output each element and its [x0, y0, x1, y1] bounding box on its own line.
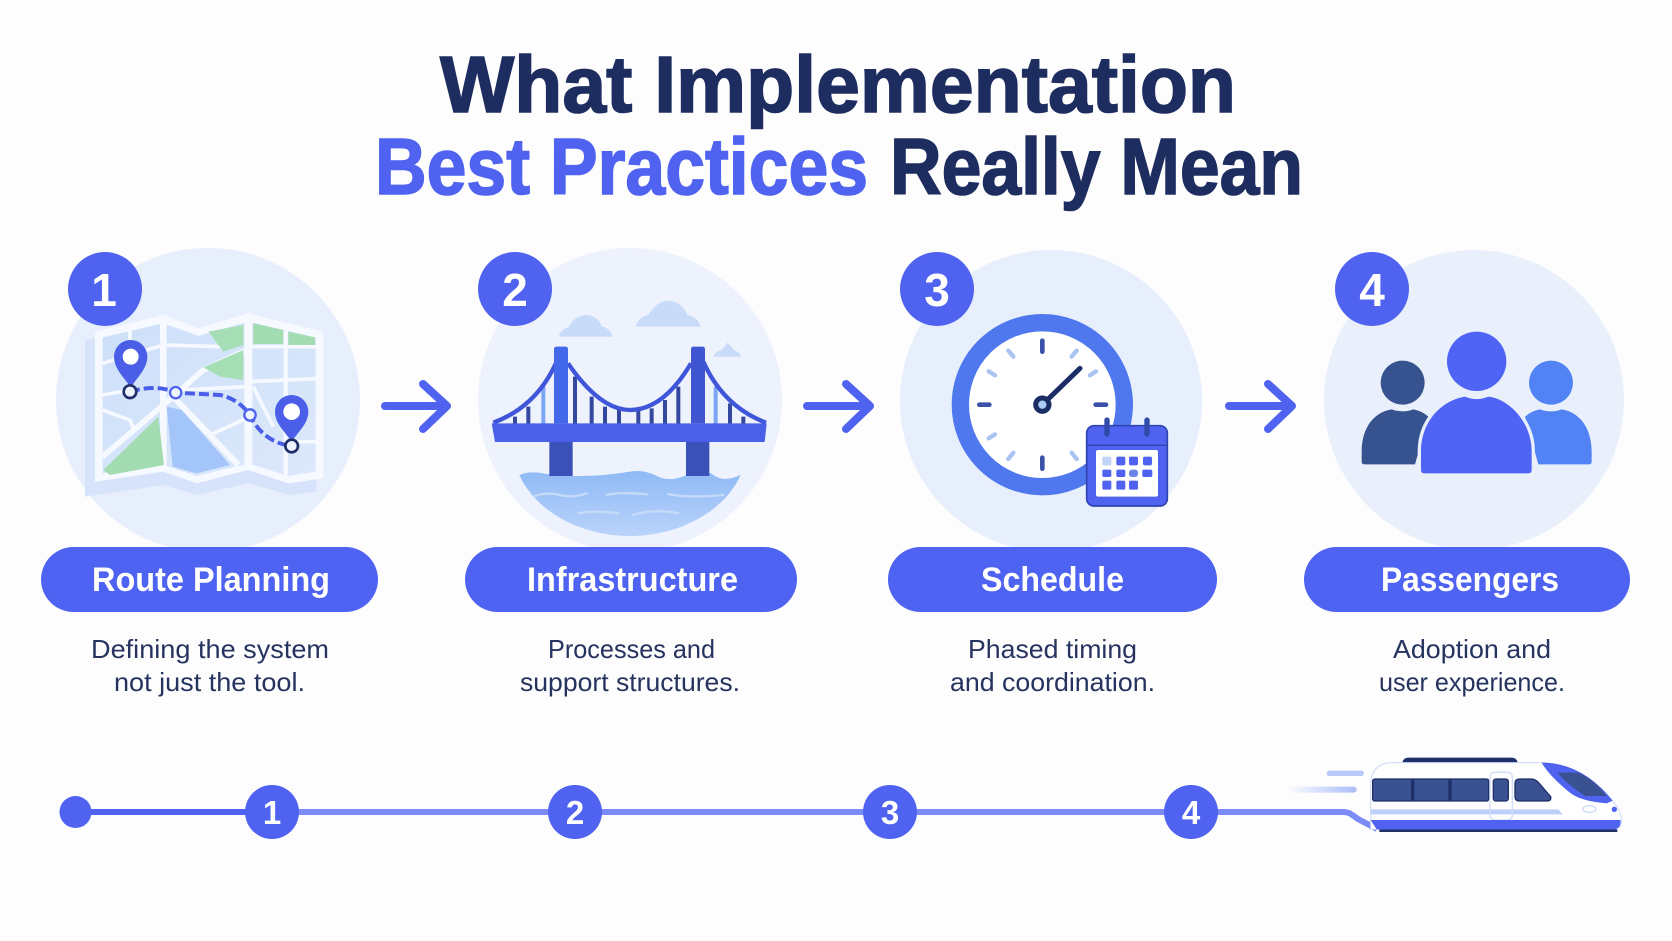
description: passengers: user experience.: [1379, 667, 1565, 697]
panel: route planning: [41, 248, 378, 697]
person center: [1421, 332, 1532, 473]
number badge 1: 1: [91, 264, 117, 316]
timeline node 3: [863, 785, 917, 839]
description: infrastructure: Processes and: [548, 634, 715, 664]
description: route planning: not just the tool.: [114, 667, 305, 697]
panel: passengers: [1304, 250, 1630, 697]
number badge 2: 2: [502, 264, 528, 316]
arrow 1 to 2: [385, 384, 447, 429]
calendar: [1087, 420, 1167, 506]
icon: high-speed train: [1287, 758, 1622, 832]
clock face: [960, 323, 1124, 487]
icon: suspension bridge: [492, 301, 767, 536]
timeline track: [76, 809, 272, 815]
panel: schedule: [888, 250, 1217, 697]
number badge 4: 4: [1359, 264, 1385, 316]
title: Really Mean: [890, 122, 1303, 211]
timeline node 1: [245, 785, 299, 839]
pill: infrastructure: [465, 547, 797, 612]
background circle 3: [900, 250, 1202, 552]
number badge 1: [68, 252, 142, 326]
timeline: [60, 758, 1622, 839]
number badge 3: [900, 252, 974, 326]
pill: route planning: Route Planning: [92, 561, 330, 599]
icon: map pin start: [114, 340, 147, 398]
background circle 4: [1324, 250, 1624, 550]
background circle 2: [478, 248, 782, 552]
background circle 1: [56, 248, 360, 552]
timeline start dot: [60, 796, 92, 828]
person right: [1525, 361, 1592, 464]
description: infrastructure: [520, 634, 740, 697]
description: route planning: [91, 634, 329, 697]
number badge 2: [478, 252, 552, 326]
icon: three people: [1362, 332, 1592, 473]
pill: passengers: Passengers: [1381, 561, 1559, 599]
arrow 2 to 3: [807, 384, 870, 429]
icon: clock with calendar: [960, 323, 1167, 506]
timeline node 2: 2: [566, 794, 584, 831]
icon: map pin end: [275, 395, 308, 452]
timeline node 4: 4: [1182, 794, 1201, 831]
pill: infrastructure: Infrastructure: [527, 561, 738, 599]
title: Best Practices: [375, 122, 868, 211]
description: infrastructure: support structures.: [520, 667, 740, 697]
description: passengers: [1379, 634, 1565, 697]
timeline node 1: 1: [263, 794, 281, 831]
pill: schedule: Schedule: [981, 561, 1124, 599]
timeline node 3: 3: [881, 794, 899, 831]
panel: infrastructure: [465, 248, 797, 697]
description: route planning: Defining the system: [91, 634, 329, 664]
timeline node 2: [548, 785, 602, 839]
arrow 3 to 4: [1229, 384, 1292, 429]
icon: folded map with route: [85, 313, 323, 497]
pill: route planning: [41, 547, 378, 612]
title: What Implementation: [440, 40, 1236, 129]
description: schedule: Phased timing: [968, 634, 1137, 664]
timeline node 4: [1164, 785, 1218, 839]
title: [375, 40, 1303, 211]
pill: passengers: [1304, 547, 1630, 612]
number badge 3: 3: [924, 264, 950, 316]
description: schedule: and coordination.: [950, 667, 1155, 697]
description: passengers: Adoption and: [1393, 634, 1551, 664]
description: schedule: [950, 634, 1155, 697]
person left: [1362, 361, 1428, 464]
pill: schedule: [888, 547, 1217, 612]
number badge 4: [1335, 252, 1409, 326]
